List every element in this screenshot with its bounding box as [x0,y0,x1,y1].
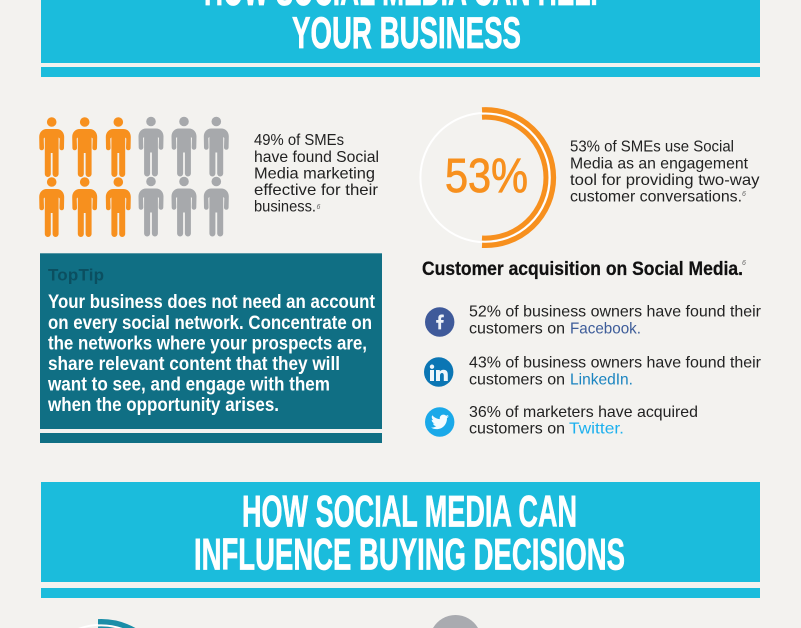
text block: 53% of SMEs: customer conversations. [570,189,742,206]
text block: 49% of SMEs: effective for their [254,182,379,199]
chart: people pictogram 49% [39,117,229,237]
heading: customer acquisition: Customer acquisition on Social Media. [422,258,743,280]
heading: top banner title [204,0,608,58]
row: linkedin: customers on [469,371,565,388]
facebook stat: 52% of business owners have found their [469,304,762,321]
row: twitter [425,404,698,438]
row: facebook [425,304,762,337]
heading: top banner title: YOUR BUSINESS [292,9,521,58]
text block: 49% of SMEs [254,132,379,216]
icon: twitter [425,407,454,437]
row: linkedin [424,354,762,388]
row: linkedin: LinkedIn. [570,371,633,388]
text block: 49% of SMEs: 6 [316,204,320,211]
chart: 53% ring [420,110,553,245]
tip body text: on every social network. Concentrate on [48,313,372,334]
tip body text [47,292,376,416]
text block: 53% of SMEs: 53% of SMEs use Social [570,139,734,156]
heading: customer acquisition: 6 [742,260,746,267]
icon: cropped gray head [433,615,478,628]
text block: 49% of SMEs: Media marketing [254,166,375,182]
ring value: 53% [445,150,528,203]
banner: how social media can influence buying decisions [41,482,760,598]
tip body text: want to see, and engage with them [47,375,330,396]
tip body text: the networks where your prospects are, [48,333,367,354]
row: facebook: customers on [469,320,565,337]
text block: 53% of SMEs: 6 [742,191,746,198]
row: twitter: Twitter. [569,421,624,438]
banner: how social media can help your business [41,0,760,77]
text block: 49% of SMEs: 49% of SMEs [254,132,344,149]
text block: 53% of SMEs: tool for providing two-way [570,172,760,189]
heading: second banner title [194,488,625,579]
row: twitter: customers on [469,421,565,438]
icon: linkedin [424,357,453,387]
tip body text: Your business does not need an account [48,292,376,313]
tip body text: when the opportunity arises. [47,395,279,416]
heading: second banner title: HOW SOCIAL MEDIA CAN [242,488,577,537]
text block: 53% of SMEs: Media as an engagement [570,155,749,172]
icon: orange people [39,117,131,237]
icon: facebook [425,307,454,337]
linkedin stat: 43% of business owners have found their [469,354,762,371]
text block: 53% of SMEs [570,139,760,206]
chart: cropped teal ring [78,619,135,628]
tip label: TopTip [48,266,104,285]
row: facebook: Facebook. [570,320,641,337]
text block: 49% of SMEs: business. [254,199,316,216]
tip body text: share relevant content that they will [48,354,340,375]
icon: gray people [138,117,229,236]
text block: 49% of SMEs: have found Social [254,149,379,166]
panel: top tip [40,253,382,443]
twitter stat: 36% of marketers have acquired [469,404,698,421]
